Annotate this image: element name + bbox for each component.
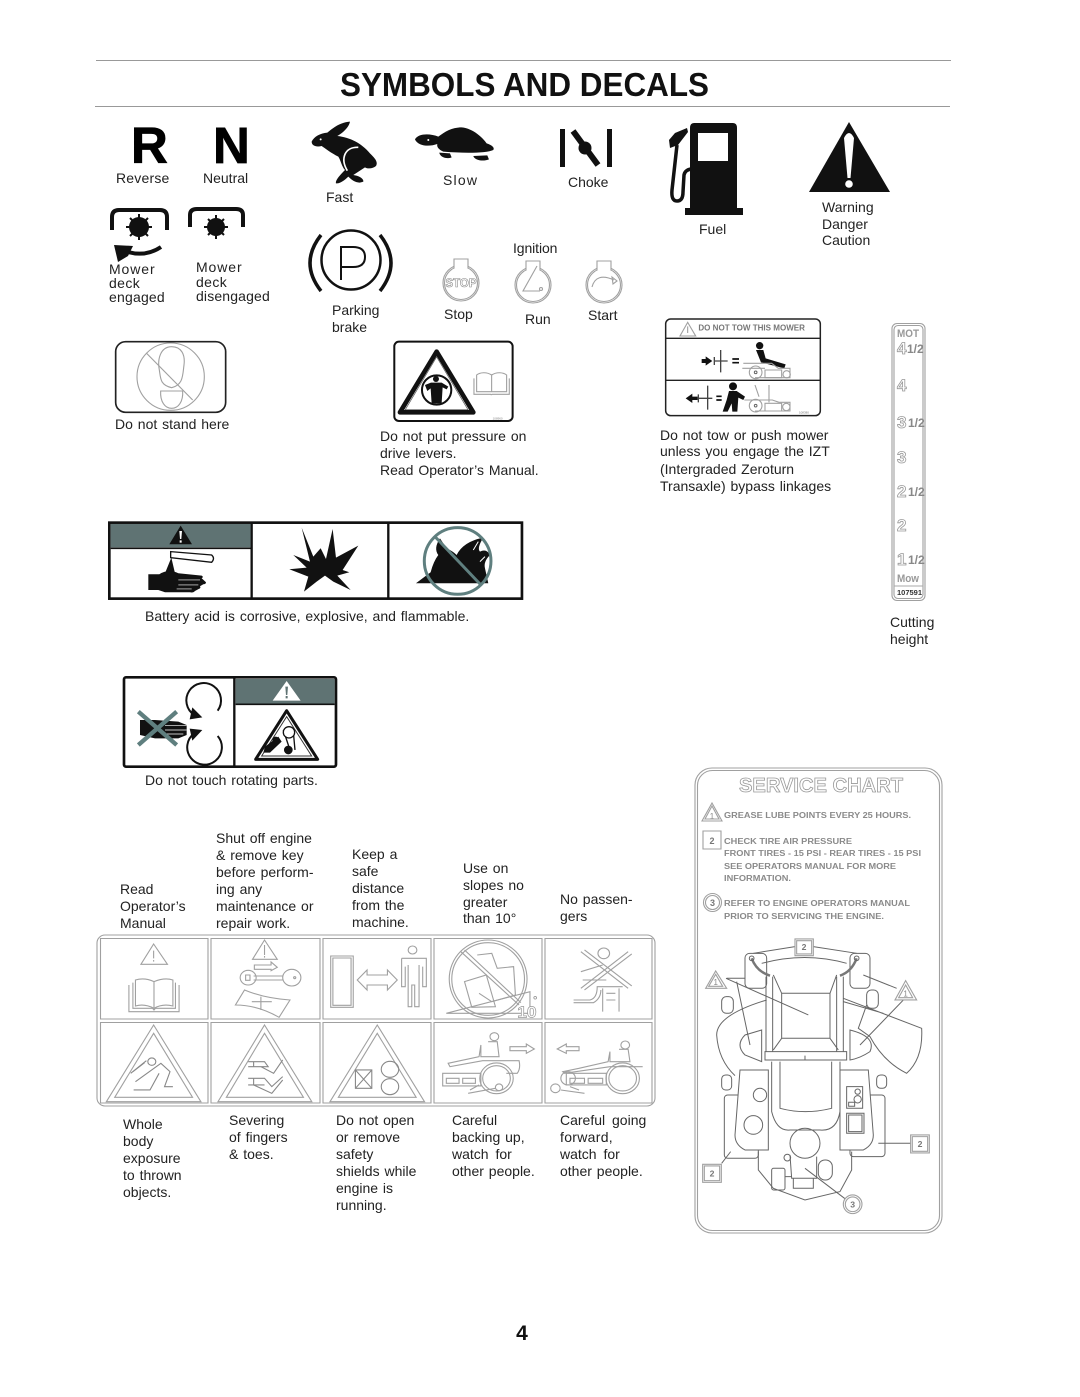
panel: service chart <box>695 768 942 1233</box>
symbol: mower deck engaged: engaged <box>109 289 165 305</box>
service chart instructions: GREASE LUBE POINTS EVERY 25 HOURS. <box>724 810 911 820</box>
caption: keep a safe distance: distance <box>352 880 404 896</box>
caption: no passengers: No passen- <box>560 891 633 907</box>
decal: do not put pressure on drive levers <box>380 342 539 478</box>
symbol: parking brake <box>310 230 391 335</box>
symbol: warning triangle: Danger <box>822 216 868 232</box>
caption: thrown objects <box>123 1116 182 1200</box>
caption: slopes: than 10° <box>463 910 516 926</box>
caption: slopes: Use on <box>463 860 508 876</box>
caption: thrown objects: body <box>123 1133 153 1149</box>
caption: careful backing up: backing up, <box>452 1129 525 1145</box>
decal: cutting height: 4 <box>897 376 907 395</box>
decal: do not tow: Transaxle) bypass linkages <box>660 478 831 494</box>
symbol: ignition start <box>586 261 622 323</box>
decal: cutting height: 3 <box>897 448 906 467</box>
symbol: mower deck disengaged: deck <box>196 274 228 290</box>
icon: backing up <box>443 1033 534 1094</box>
caption: severing fingers: Severing <box>229 1112 284 1128</box>
icon: no slopes over 10 degrees: 10 <box>517 1003 537 1021</box>
mower top-view diagram: 2 <box>710 1168 715 1178</box>
caption: safety shields: shields while <box>336 1163 417 1179</box>
decal: cutting height: height <box>890 631 928 647</box>
symbol: ignition stop: Stop <box>444 306 473 322</box>
decal: cutting height: 1/2 <box>908 485 925 499</box>
symbol: neutral: Neutral <box>203 170 248 186</box>
caption: keep a safe distance: from the <box>352 897 405 913</box>
mower top-view diagram: 2 <box>918 1139 923 1149</box>
symbol: ignition start: Start <box>588 307 618 323</box>
decal: do not put pressure on drive levers: Read Operator’s Manual. <box>380 462 539 478</box>
icon: no slopes over 10 degrees: ° <box>533 995 538 1007</box>
caption: no passengers: gers <box>560 908 587 924</box>
caption: thrown objects: exposure <box>123 1150 181 1166</box>
decal: cutting height: 3 <box>897 413 906 432</box>
symbol: fast rabbit: Fast <box>326 189 353 205</box>
icon: going forward <box>551 1041 643 1094</box>
caption: shut off engine: repair work. <box>216 915 290 931</box>
caption: slopes <box>463 860 524 926</box>
service chart heading: SERVICE CHART <box>739 775 903 797</box>
icon: no slopes over 10 degrees <box>446 940 538 1021</box>
symbol: reverse: R <box>131 117 168 174</box>
caption: careful backing up <box>451 1112 535 1179</box>
decal: cutting height <box>890 324 934 647</box>
service chart instructions: 1 <box>710 812 715 821</box>
decal: do not put pressure on drive levers: Do not put pressure on <box>380 428 526 444</box>
decal: do not tow: DO NOT TOW THIS MOWER <box>698 323 805 333</box>
caption: severing fingers: & toes. <box>229 1146 274 1162</box>
symbol: mower deck engaged <box>109 210 167 305</box>
decal: do not tow <box>660 319 831 494</box>
decal: battery acid: Battery acid is corrosive, explosive, and flammable. <box>145 608 469 624</box>
decal: do not tow: 108380 <box>799 410 809 414</box>
symbol: mower deck engaged: deck <box>109 275 141 291</box>
decal: cutting height: 2 <box>897 482 906 501</box>
label: ignition: Ignition <box>513 240 557 256</box>
symbol: ignition stop: STOP <box>446 276 476 290</box>
caption: careful going forward <box>559 1112 646 1179</box>
symbol: mower deck engaged: Mower <box>109 261 156 277</box>
decal: battery acid <box>109 523 522 624</box>
symbol: ignition stop <box>443 259 479 322</box>
caption: careful backing up: watch for <box>451 1146 512 1162</box>
symbol: reverse <box>116 117 170 186</box>
decal: cutting height: 1/2 <box>908 416 925 430</box>
service chart instructions <box>702 803 921 921</box>
caption: severing fingers <box>229 1112 288 1162</box>
decal: do not tow: unless you engage the IZT <box>660 443 830 459</box>
service chart instructions: SEE OPERATORS MANUAL FOR MORE <box>724 861 896 871</box>
symbol: mower deck disengaged: Mower <box>196 259 243 275</box>
symbol: reverse: Reverse <box>116 170 170 186</box>
symbol: choke <box>560 129 612 190</box>
decal: do not touch rotating parts <box>124 677 336 788</box>
decal: cutting height: 107591 <box>897 588 922 597</box>
caption: keep a safe distance: machine. <box>352 914 409 930</box>
symbol: ignition run: Run <box>525 311 551 327</box>
symbol: parking brake: brake <box>332 319 367 335</box>
icon: no passengers <box>574 948 632 1012</box>
service chart instructions: FRONT TIRES - 15 PSI - REAR TIRES - 15 PSI <box>724 848 921 858</box>
symbol: warning triangle <box>809 122 890 248</box>
caption: safety shields: or remove <box>336 1129 400 1145</box>
service chart instructions: CHECK TIRE AIR PRESSURE <box>724 836 852 846</box>
decal: do not put pressure on drive levers: drive levers. <box>380 445 456 461</box>
caption: keep a safe distance <box>352 846 409 930</box>
service chart instructions: PRIOR TO SERVICING THE ENGINE. <box>724 911 884 921</box>
decal: cutting height: 4 <box>897 339 907 358</box>
service chart instructions: 2 <box>709 836 715 846</box>
symbol: warning triangle: Warning <box>822 199 874 215</box>
caption: thrown objects: to thrown <box>123 1167 182 1183</box>
caption: careful going forward: forward, <box>560 1129 613 1145</box>
caption: slopes: greater <box>463 894 508 910</box>
caption: read operator's manual: Manual <box>120 915 166 931</box>
decal: do not stand here <box>115 342 230 432</box>
decal: cutting height: Mow <box>897 573 919 585</box>
caption: safety shields <box>336 1112 417 1213</box>
caption: shut off engine: & remove key <box>216 847 304 863</box>
caption: read operator's manual: Read <box>120 881 153 897</box>
decal: cutting height: 2 <box>897 516 906 535</box>
service chart instructions: REFER TO ENGINE OPERATORS MANUAL <box>724 898 910 908</box>
symbol: warning triangle: Caution <box>822 232 870 248</box>
mower top-view diagram: 3 <box>850 1200 855 1210</box>
caption: safety shields: safety <box>336 1146 373 1162</box>
decal: do not tow: (Intergraded Zeroturn <box>660 461 794 477</box>
caption: no passengers <box>560 891 633 924</box>
service chart instructions: INFORMATION. <box>724 873 791 883</box>
caption: careful going forward: Careful going <box>560 1112 646 1128</box>
mower top-view diagram: 2 <box>802 942 807 952</box>
caption: careful backing up: other people. <box>452 1163 535 1179</box>
symbol: fast rabbit <box>312 122 377 205</box>
caption: read operator's manual <box>120 881 186 931</box>
mower top-view diagram: 1 <box>713 978 718 987</box>
service chart instructions: 3 <box>710 898 715 908</box>
caption: keep a safe distance: Keep a <box>352 846 398 862</box>
caption: shut off engine: Shut off engine <box>216 830 312 846</box>
caption: careful backing up: Careful <box>452 1112 497 1128</box>
caption: shut off engine <box>216 830 314 931</box>
decal: do not tow: Do not tow or push mower <box>660 427 829 443</box>
mower top-view diagram <box>703 939 929 1214</box>
decal: cutting height: 1/2 <box>908 553 925 567</box>
symbol: fuel pump <box>669 123 743 237</box>
caption: keep a safe distance: safe <box>352 863 379 879</box>
symbol: parking brake: Parking <box>332 302 379 318</box>
symbol: neutral: N <box>213 117 250 174</box>
decal: do not stand here: Do not stand here <box>115 416 230 432</box>
icon: remove key <box>235 940 301 1017</box>
caption: shut off engine: maintenance or <box>216 898 314 914</box>
icon: safe distance <box>331 946 426 1007</box>
caption: shut off engine: ing any <box>216 881 262 897</box>
icon: read manual <box>129 944 179 1012</box>
symbol: neutral <box>203 117 250 186</box>
title: SYMBOLS AND DECALS <box>340 66 709 103</box>
caption: shut off engine: before perform- <box>216 864 314 880</box>
symbol: mower deck disengaged <box>190 209 270 304</box>
decal: cutting height: MOT <box>897 328 919 340</box>
decal: cutting height: 1 <box>897 550 906 569</box>
caption: careful going forward: other people. <box>560 1163 643 1179</box>
symbol: choke: Choke <box>568 174 609 190</box>
decal: do not put pressure on drive levers: 108960 <box>493 416 503 420</box>
decal: cutting height: Cutting <box>890 614 934 630</box>
page number: 4 <box>516 1322 528 1345</box>
panel: safety icon grid <box>97 935 655 1106</box>
caption: safety shields: engine is <box>336 1180 393 1196</box>
caption: slopes: slopes no <box>463 877 524 893</box>
symbol: slow turtle: Slow <box>443 172 478 188</box>
caption: safety shields: running. <box>336 1197 387 1213</box>
decal: cutting height: 1/2 <box>907 342 924 356</box>
caption: careful going forward: watch for <box>559 1146 620 1162</box>
icon: thrown objects warning <box>106 1025 201 1102</box>
caption: severing fingers: of fingers <box>229 1129 288 1145</box>
symbol: ignition run <box>515 261 551 327</box>
symbol: slow turtle <box>415 127 494 188</box>
mower top-view diagram: 1 <box>903 990 908 999</box>
caption: safety shields: Do not open <box>336 1112 414 1128</box>
symbol: mower deck disengaged: disengaged <box>196 288 270 304</box>
decal: do not touch rotating parts: Do not touch rotating parts. <box>145 772 318 788</box>
icon: severing fingers warning <box>218 1025 312 1102</box>
caption: read operator's manual: Operator’s <box>120 898 186 914</box>
caption: thrown objects: objects. <box>123 1184 171 1200</box>
icon: safety shields warning <box>330 1025 425 1102</box>
caption: thrown objects: Whole <box>123 1116 163 1132</box>
symbol: fuel pump: Fuel <box>699 221 726 237</box>
